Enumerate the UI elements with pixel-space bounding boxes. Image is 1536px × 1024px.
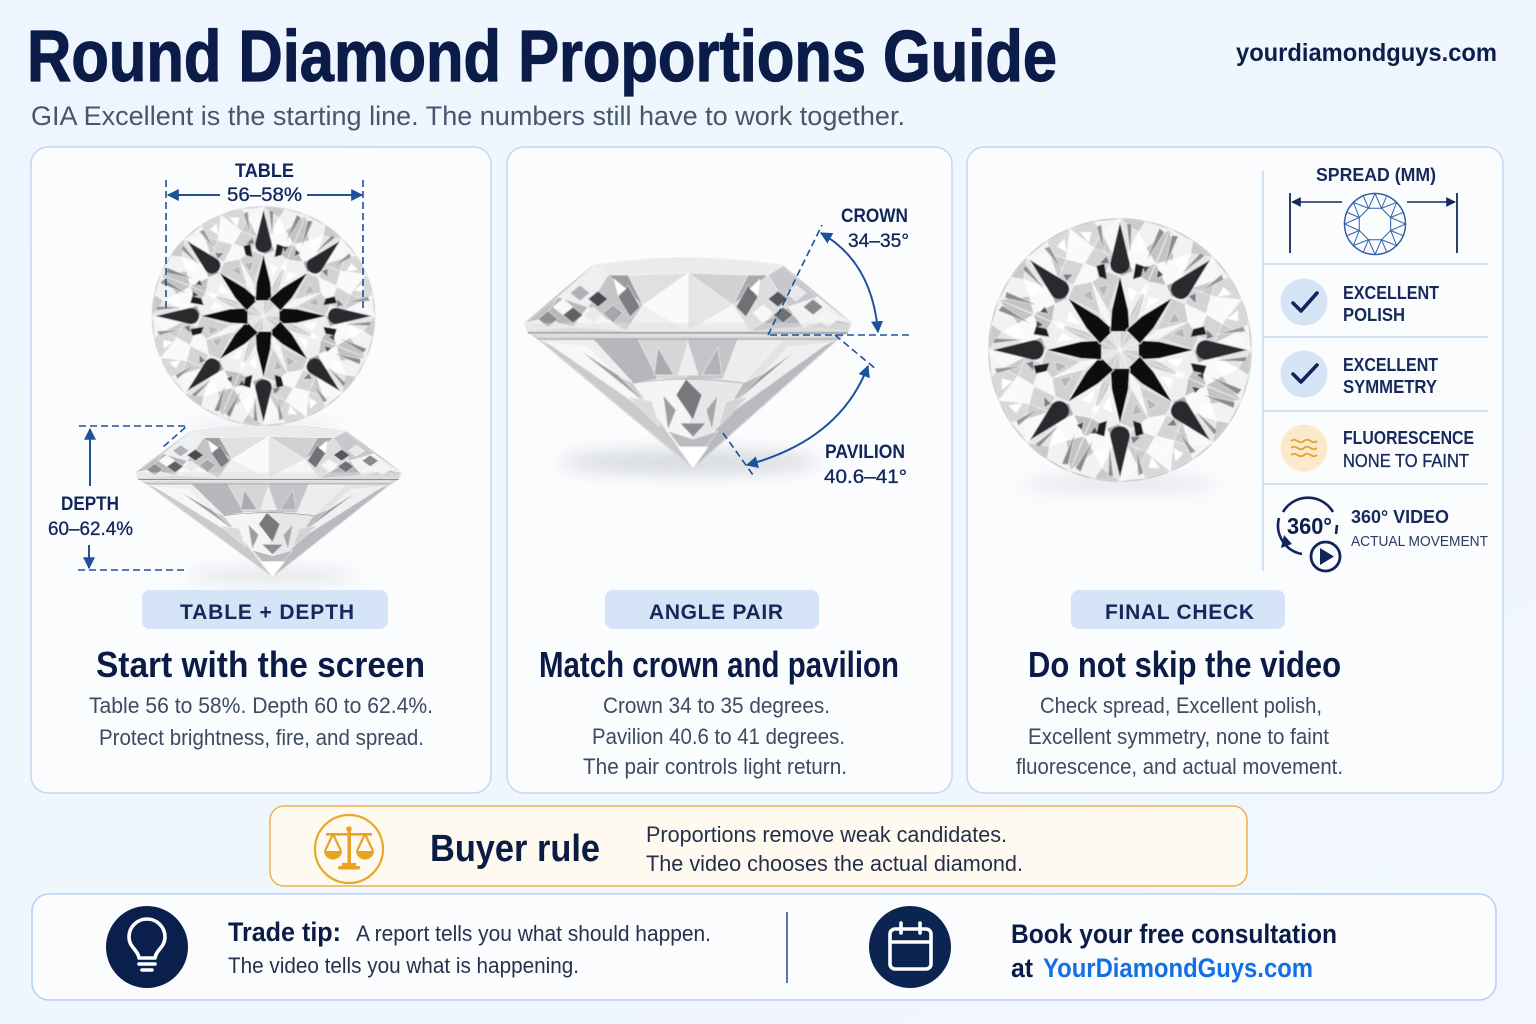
website address: yourdiamondguys.com: [1236, 39, 1497, 67]
pavilion angle annotation: 40.6–41°: [824, 467, 907, 488]
pavilion angle annotation: [723, 335, 907, 488]
shadow under diamond: [1020, 478, 1220, 490]
body text: fluorescence, and actual movement.: [1016, 754, 1343, 779]
crown angle annotation: CROWN: [841, 206, 908, 227]
buyer rule text: Proportions remove weak candidates.: [646, 822, 1007, 847]
crown angle annotation: 34–35°: [848, 231, 909, 252]
heading: Match crown and pavilion: [539, 644, 899, 685]
tag: angle pair: ANGLE PAIR: [649, 601, 783, 624]
buyer rule heading: Buyer rule: [430, 828, 600, 870]
buyer rule text: The video chooses the actual diamond.: [646, 851, 1023, 876]
panel: trade tip and consultation: [32, 894, 1496, 1000]
trade tip text: [228, 917, 711, 978]
consultation call to action: [1011, 919, 1337, 983]
spread measurement: [1290, 165, 1457, 254]
body text: Protect brightness, fire, and spread.: [99, 725, 424, 750]
depth measurement: DEPTH: [61, 494, 119, 515]
spread measurement: SPREAD (MM): [1316, 165, 1436, 185]
title: Round Diamond Proportions Guide: [27, 17, 1057, 97]
crown angle annotation: [768, 206, 913, 335]
icon: round diamond outline: [1344, 194, 1406, 254]
buyer rule text: [646, 822, 1023, 876]
body text: Crown 34 to 35 degrees.: [603, 693, 830, 718]
body text: [89, 693, 433, 750]
shadow under side view diamond: [185, 570, 355, 582]
depth measurement: 60–62.4%: [48, 519, 133, 540]
check: excellent symmetry: SYMMETRY: [1343, 377, 1437, 397]
shadow under diamond: [560, 450, 820, 474]
icon: light bulb: [106, 906, 188, 988]
360 video: 360° VIDEO: [1351, 507, 1449, 527]
check: excellent symmetry: EXCELLENT: [1343, 355, 1438, 375]
check: excellent polish: EXCELLENT: [1343, 283, 1439, 303]
icon: balance scale: [315, 815, 383, 883]
panel: angle pair: [507, 147, 952, 793]
trade tip text: The video tells you what is happening.: [228, 953, 579, 978]
icon: 360 rotation with play button: 360°: [1287, 513, 1332, 539]
tag: final check: FINAL CHECK: [1105, 601, 1254, 624]
consultation call to action: Book your free consultation: [1011, 919, 1337, 949]
consultation call to action: YourDiamondGuys.com: [1043, 953, 1313, 983]
body text: Pavilion 40.6 to 41 degrees.: [592, 724, 845, 749]
body text: Excellent symmetry, none to faint: [1028, 724, 1329, 749]
tag: angle pair: [605, 590, 819, 629]
icon: 360 rotation with play button: [1278, 498, 1340, 571]
fluorescence: NONE TO FAINT: [1343, 451, 1469, 471]
table guide lines: [166, 180, 363, 310]
fluorescence: FLUORESCENCE: [1343, 428, 1474, 448]
table measurement: TABLE: [235, 161, 294, 182]
360 video: ACTUAL MOVEMENT: [1351, 533, 1488, 550]
body text: The pair controls light return.: [583, 754, 847, 779]
icon: calendar: [869, 906, 951, 988]
callout: buyer rule: [270, 806, 1247, 886]
subtitle: GIA Excellent is the starting line. The numbers still have to work together.: [31, 101, 905, 131]
body text: [1016, 693, 1343, 779]
consultation call to action: at: [1011, 953, 1033, 983]
table measurement: [168, 161, 362, 206]
tag: table + depth: TABLE + DEPTH: [180, 601, 354, 624]
panel: final check: [967, 147, 1503, 793]
check: excellent symmetry: [1280, 350, 1438, 398]
diamond side view: [525, 258, 851, 468]
checklist dividers: [1263, 171, 1488, 571]
fluorescence: [1280, 424, 1474, 472]
shadow under top view diamond: [184, 422, 344, 430]
depth measurement: [48, 426, 188, 570]
diamond top view: [152, 207, 374, 425]
heading: Do not skip the video: [1028, 644, 1341, 685]
trade tip text: Trade tip:: [228, 917, 341, 947]
body text: Table 56 to 58%. Depth 60 to 62.4%.: [89, 693, 433, 718]
tag: final check: [1071, 590, 1285, 629]
table measurement: 56–58%: [227, 185, 302, 206]
body text: Check spread, Excellent polish,: [1040, 693, 1322, 718]
diamond top view: [989, 219, 1251, 481]
diamond side view: [136, 426, 401, 577]
panel: table and depth: [31, 147, 491, 793]
tag: table + depth: [142, 590, 388, 629]
body text: [583, 693, 847, 779]
check: excellent polish: [1280, 278, 1439, 326]
heading: Start with the screen: [96, 644, 425, 685]
check: excellent polish: POLISH: [1343, 305, 1405, 325]
360 video: [1278, 498, 1488, 571]
trade tip text: A report tells you what should happen.: [356, 921, 711, 946]
pavilion angle annotation: PAVILION: [825, 442, 905, 463]
